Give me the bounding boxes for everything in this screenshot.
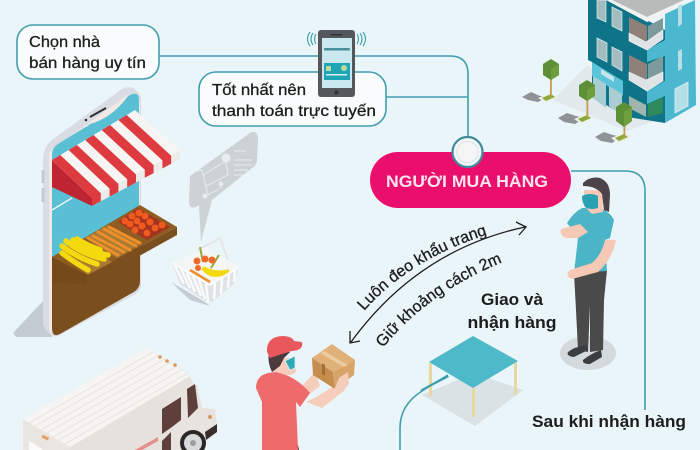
head [270,358,296,375]
illustration: three trees [522,59,632,144]
parcel [312,344,355,389]
illustration: delivery man with parcel [256,336,355,450]
arms [300,372,320,398]
legs [574,270,607,352]
illustration: apartment building [553,0,696,131]
illustration: delivery van [23,348,217,450]
label: keep 2m distance: Giữ khoảng cách 2m [376,255,502,346]
shirt [256,372,310,450]
icon: cart notification bubble [189,132,258,242]
illustration: woman in mask [560,178,616,370]
label: delivery and receipt: Giao và [481,291,544,309]
arms [561,224,588,238]
callout: choose reputable seller [17,25,159,79]
label: delivery and receipt [468,291,556,332]
callout: choose reputable seller: Chọn nhà [29,34,100,51]
produce [190,247,229,282]
hand on parcel [334,372,349,392]
icon: smartphone with card payment [308,30,366,97]
callout: choose reputable seller: bán hàng uy tín [29,55,146,72]
label: after receiving goods: Sau khi nhận hàng [532,413,686,431]
illustration: handover table [420,336,523,426]
callout: pay online: thanh toán trực tuyến [212,103,376,120]
tomatoes [122,210,166,236]
callout: pay online: Tốt nhất nên [212,82,306,99]
carrots [88,227,140,255]
illustration: striped awning [52,110,180,206]
illustration: shopping basket [171,238,239,306]
illustration: fruit shelf [52,205,177,285]
curved double-headed arrow [350,222,526,343]
torso [567,208,614,273]
illustration: phone shopfront [13,87,141,337]
callout: pay online [199,72,386,126]
connector node circle [452,137,482,167]
bananas [62,239,108,270]
label: delivery and receipt: nhận hàng [468,314,556,332]
heading pill: buyer: NGƯỜI MUA HÀNG [386,172,548,191]
head [584,190,603,214]
heading pill: buyer [370,152,571,208]
label: always wear a mask: Luôn đeo khẩu trang [356,226,486,310]
connector lines [159,56,645,450]
